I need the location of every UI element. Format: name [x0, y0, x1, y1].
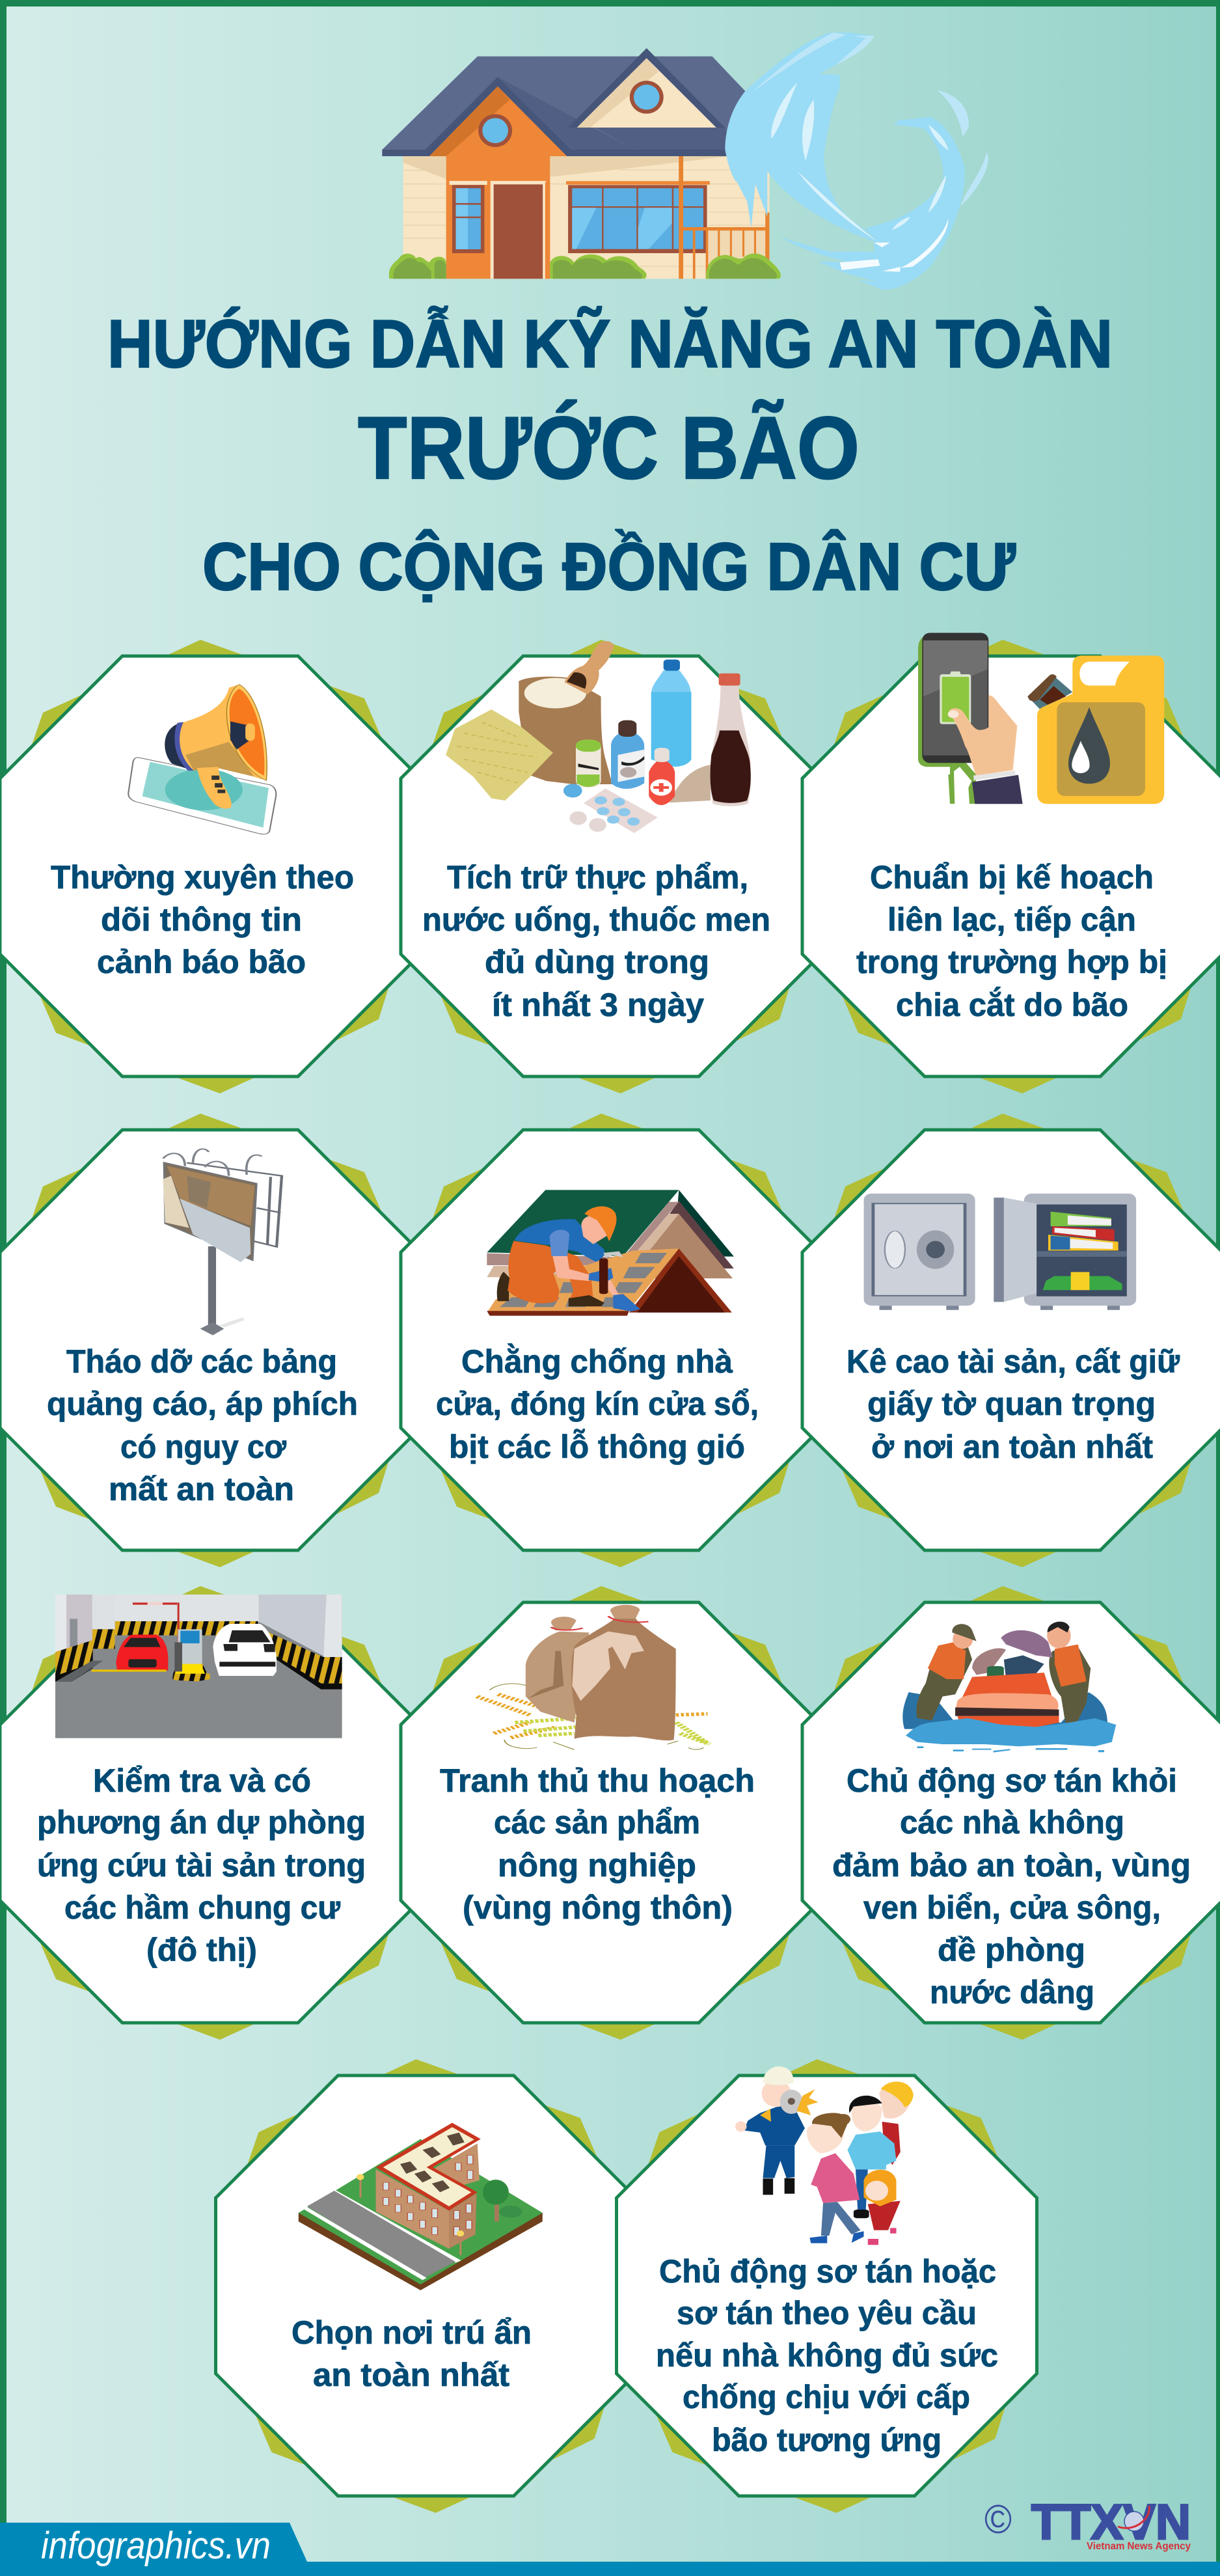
text: follow storm warnings [51, 859, 354, 980]
text: evacuate unsafe homes: các nhà không [900, 1804, 1124, 1841]
text: store supplies: ít nhất 3 ngày [492, 987, 704, 1023]
icon: soldiers rescuing people by raft [902, 1622, 1116, 1753]
text: evacuate unsafe homes: đảm bảo an toàn, vùng [832, 1847, 1191, 1884]
text: store supplies: đủ dùng trong [485, 944, 709, 980]
text: communication plan [856, 859, 1167, 1023]
footer bar with website tab [0, 2523, 1220, 2576]
text: harvest crops: Tranh thủ thu hoạch [440, 1762, 755, 1799]
text: communication plan: chia cắt do bão [896, 987, 1128, 1023]
logo: TTXVN: TTXVN [1031, 2495, 1191, 2550]
text: evacuate unsafe homes: đề phòng [938, 1932, 1085, 1968]
text: follow storm warnings: cảnh báo bão [97, 944, 306, 980]
text: evacuate unsafe homes [832, 1762, 1191, 2010]
text: harvest crops: các sản phẩm [494, 1804, 700, 1841]
logo: TTXVN: Vietnam News Agency [1087, 2541, 1191, 2552]
title: HƯỚNG DẪN KỸ NĂNG AN TOÀN [107, 307, 1113, 382]
icon: food, bottles and medicine [446, 641, 751, 806]
text: check basement parking: các hầm chung cư [64, 1889, 341, 1926]
text: evacuate on request: nếu nhà không đủ sức [656, 2337, 998, 2374]
panel: store food, water and medicine [401, 640, 821, 1093]
panel: evacuate on request [617, 2059, 1037, 2513]
text: harvest crops: (vùng nông thôn) [463, 1889, 733, 1926]
text: reinforce house: cửa, đóng kín cửa sổ, [436, 1386, 759, 1422]
icon: grain sacks and rice stalks [477, 1605, 710, 1749]
text: check basement parking: phương án dự phòng [37, 1804, 366, 1841]
text: remove billboards: Tháo dỡ các bảng [66, 1343, 337, 1380]
text: reinforce house: Chằng chống nhà [461, 1343, 733, 1380]
title [107, 307, 1113, 604]
website label: infographics.vn [41, 2525, 271, 2567]
text: reinforce house [436, 1343, 759, 1465]
text: communication plan: liên lạc, tiếp cận [888, 901, 1136, 938]
text: communication plan: Chuẩn bị kế hoạch [870, 859, 1154, 896]
text: communication plan: trong trường hợp bị [856, 944, 1167, 980]
panel: choose safest shelter [216, 2059, 636, 2513]
panel: communication plan [802, 633, 1220, 1093]
text: reinforce house: bịt các lỗ thông gió [449, 1429, 745, 1465]
text: follow storm warnings: Thường xuyên theo [51, 859, 354, 896]
panel: store valuables safely [802, 1114, 1220, 1567]
text: evacuate on request [656, 2253, 998, 2458]
text: store supplies: nước uống, thuốc men [422, 901, 770, 938]
text: choose safest shelter: an toàn nhất [313, 2357, 509, 2393]
text: check basement parking: Kiểm tra và có [93, 1762, 311, 1799]
text: evacuate on request: chống chịu với cấp [683, 2379, 970, 2415]
text: harvest crops [440, 1762, 755, 1926]
panel: evacuate unsafe homes [802, 1586, 1220, 2040]
text: evacuate unsafe homes: ven biển, cửa sông, [863, 1889, 1161, 1926]
icon: phone and fuel can [918, 633, 1164, 804]
text: remove billboards: quảng cáo, áp phích [47, 1386, 358, 1422]
title: CHO CỘNG ĐỒNG DÂN CƯ [202, 529, 1016, 604]
panel: reinforce house [401, 1114, 821, 1567]
icon: megaphone on phone [128, 685, 276, 834]
text: remove billboards [47, 1343, 358, 1507]
panel: harvest crops [401, 1586, 821, 2040]
text: store supplies [422, 859, 770, 1023]
text: store valuables safely: giấy tờ quan trọng [867, 1386, 1156, 1422]
text: harvest crops: nông nghiệp [498, 1847, 696, 1884]
text: store supplies: Tích trữ thực phẩm, [447, 859, 748, 896]
icon: apartment building on a street [299, 2123, 543, 2290]
text: evacuate on request: sơ tán theo yêu cầu [677, 2295, 977, 2331]
icon: damaged billboard [163, 1149, 282, 1336]
panel: remove billboards [0, 1114, 420, 1567]
text: evacuate unsafe homes: Chủ động sơ tán khỏi [847, 1762, 1177, 1799]
title: TRƯỚC BÃO [358, 398, 860, 497]
panel: follow storm warnings [0, 640, 420, 1093]
text: store valuables safely [847, 1343, 1180, 1465]
text: evacuate on request: bão tương ứng [712, 2422, 942, 2458]
water swirl [725, 33, 988, 290]
text: choose safest shelter [291, 2314, 532, 2393]
icon: officer with megaphone and family [735, 2066, 914, 2245]
text: store valuables safely: ở nơi an toàn nhất [871, 1429, 1153, 1465]
image: basement car park [55, 1595, 342, 1738]
text: check basement parking: (đô thị) [146, 1932, 257, 1968]
icon: closed and open safes [864, 1194, 1136, 1310]
logo: TTXVN: © [984, 2497, 1012, 2542]
text: remove billboards: mất an toàn [109, 1471, 294, 1507]
text: check basement parking [37, 1762, 366, 1968]
illustration: house with swirling water [382, 33, 988, 290]
text: follow storm warnings: dõi thông tin [101, 901, 302, 938]
text: store valuables safely: Kê cao tài sản, cất giữ [847, 1343, 1180, 1380]
text: evacuate on request: Chủ động sơ tán hoặc [659, 2253, 996, 2290]
text: check basement parking: ứng cứu tài sản trong [37, 1847, 366, 1884]
panel: check basement parking [0, 1586, 420, 2040]
icon: worker repairing a roof [487, 1190, 734, 1316]
text: evacuate unsafe homes: nước dâng [930, 1974, 1094, 2010]
text: choose safest shelter: Chọn nơi trú ẩn [291, 2314, 532, 2351]
icon: blister pack and pills [563, 784, 658, 833]
text: remove billboards: có nguy cơ [120, 1429, 286, 1465]
